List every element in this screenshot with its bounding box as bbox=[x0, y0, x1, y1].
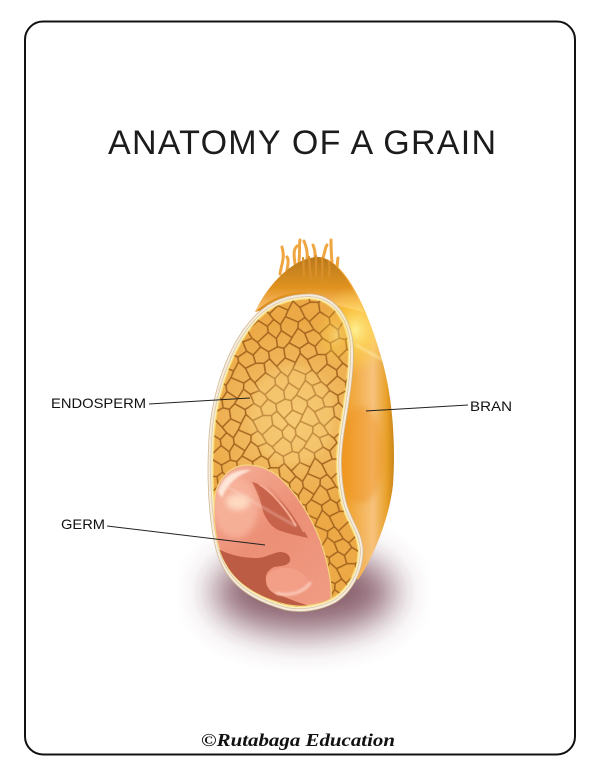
bran hairs bbox=[280, 240, 338, 274]
label: bran: BRAN bbox=[470, 398, 512, 414]
grain illustration bbox=[208, 240, 396, 634]
label: germ: GERM bbox=[61, 516, 105, 532]
germ highlights bbox=[214, 478, 258, 538]
germ streaks bbox=[252, 482, 308, 538]
bran outer layer bbox=[255, 257, 394, 580]
endosperm shell bbox=[213, 299, 358, 606]
label: bran bbox=[366, 398, 512, 414]
footer credit: ©Rutabaga Education bbox=[201, 730, 395, 750]
germ dark lower left bbox=[220, 550, 308, 606]
germ bbox=[208, 465, 331, 606]
bran dome shading bbox=[255, 257, 364, 312]
label: endosperm: ENDOSPERM bbox=[51, 395, 146, 411]
bran light flare bbox=[336, 292, 384, 504]
germ lobe bbox=[266, 568, 309, 596]
endosperm cells bbox=[213, 299, 358, 606]
drop shadow bbox=[212, 550, 396, 634]
label: endosperm bbox=[51, 395, 250, 411]
dome hair roots bbox=[303, 256, 329, 282]
label: germ bbox=[61, 516, 265, 545]
title: ANATOMY OF A GRAIN bbox=[108, 124, 496, 162]
